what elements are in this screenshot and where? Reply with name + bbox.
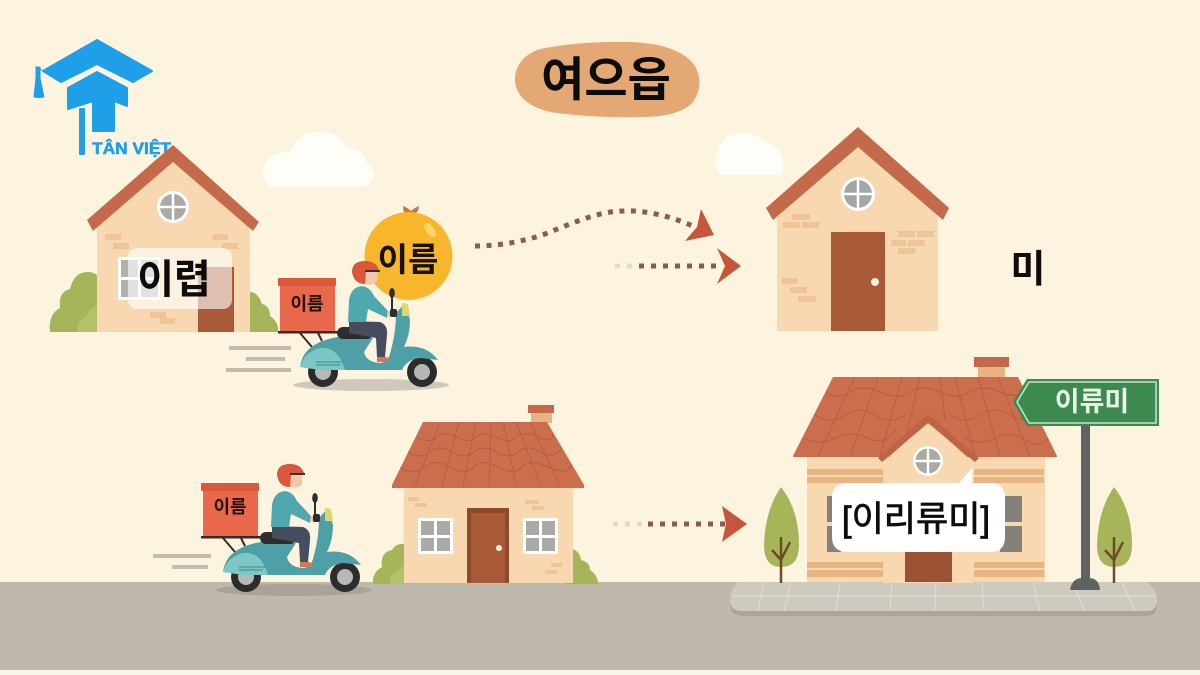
rider <box>271 464 316 567</box>
shadow <box>216 584 372 596</box>
delivery box <box>278 278 338 347</box>
house: bottom middle <box>373 405 598 584</box>
rider <box>348 261 393 362</box>
roof <box>87 145 259 231</box>
money bag: 이름 <box>378 241 438 278</box>
seat <box>337 327 373 339</box>
roof <box>766 127 949 220</box>
arrow: straight top <box>615 248 741 284</box>
window: round <box>841 177 875 211</box>
arrow: straight bottom <box>613 506 747 542</box>
scooter body <box>223 508 361 575</box>
sidewalk <box>730 582 1157 616</box>
chimney <box>974 357 1009 378</box>
bricks <box>807 469 1044 577</box>
mirror and handle <box>312 493 320 522</box>
cloud: right <box>715 134 783 175</box>
tree: right <box>1097 487 1132 583</box>
scooter body <box>300 303 438 370</box>
speech bubble <box>832 467 1005 552</box>
street sign <box>1013 379 1159 590</box>
wall <box>404 487 573 583</box>
title pill <box>515 42 700 117</box>
delivery box: 이름 <box>213 497 247 517</box>
scooter rider: bottom <box>201 464 372 596</box>
mirror and handle <box>389 288 397 317</box>
title pill: 여으읍 <box>541 53 671 106</box>
window: right <box>523 518 558 554</box>
window: round <box>157 191 189 223</box>
house: bottom right <box>793 357 1057 583</box>
wheels <box>308 357 437 387</box>
window: left <box>418 518 453 554</box>
wheels <box>231 562 360 592</box>
window: round <box>913 446 943 476</box>
delivery box <box>201 483 261 552</box>
door <box>905 552 952 582</box>
house: top left <box>50 145 278 332</box>
bushes <box>50 272 278 332</box>
windows <box>827 496 1022 552</box>
roof <box>793 377 1057 457</box>
delivery box: 이름 <box>290 294 324 314</box>
cloud: left <box>263 132 374 186</box>
gable <box>883 422 973 583</box>
scooter rider: top <box>278 206 452 391</box>
speed lines: top scooter <box>226 346 291 372</box>
sign border <box>1017 382 1156 423</box>
tree: left <box>764 487 799 583</box>
seat <box>260 532 296 544</box>
bricks <box>408 497 562 574</box>
roof <box>392 422 584 488</box>
door <box>198 267 234 332</box>
door <box>467 508 509 583</box>
logo: Tan Viet: TÂN VIỆT <box>92 139 172 158</box>
label: mi: 미 <box>1011 249 1045 291</box>
speed lines: bottom scooter <box>153 554 211 569</box>
wall <box>97 160 250 332</box>
logo: Tan Viet <box>34 40 172 158</box>
bricks <box>782 214 934 302</box>
gable roof <box>878 414 979 462</box>
pole <box>1070 426 1100 590</box>
shadow <box>293 379 449 391</box>
sign text: 이류미 <box>1055 387 1129 417</box>
door <box>831 232 885 331</box>
arrow: curved dotted <box>475 209 714 246</box>
window: square <box>118 257 160 300</box>
sign plate <box>1013 379 1159 426</box>
text label on house <box>128 248 232 309</box>
ground <box>0 582 1200 675</box>
speech bubble: [이리류미] <box>842 500 990 539</box>
text label on house: 이렵 <box>137 258 211 302</box>
bricks <box>105 234 238 324</box>
house: top right <box>766 127 949 331</box>
bushes <box>373 544 598 584</box>
money bag <box>364 206 452 300</box>
chimney <box>528 405 554 423</box>
wall <box>807 456 1045 582</box>
